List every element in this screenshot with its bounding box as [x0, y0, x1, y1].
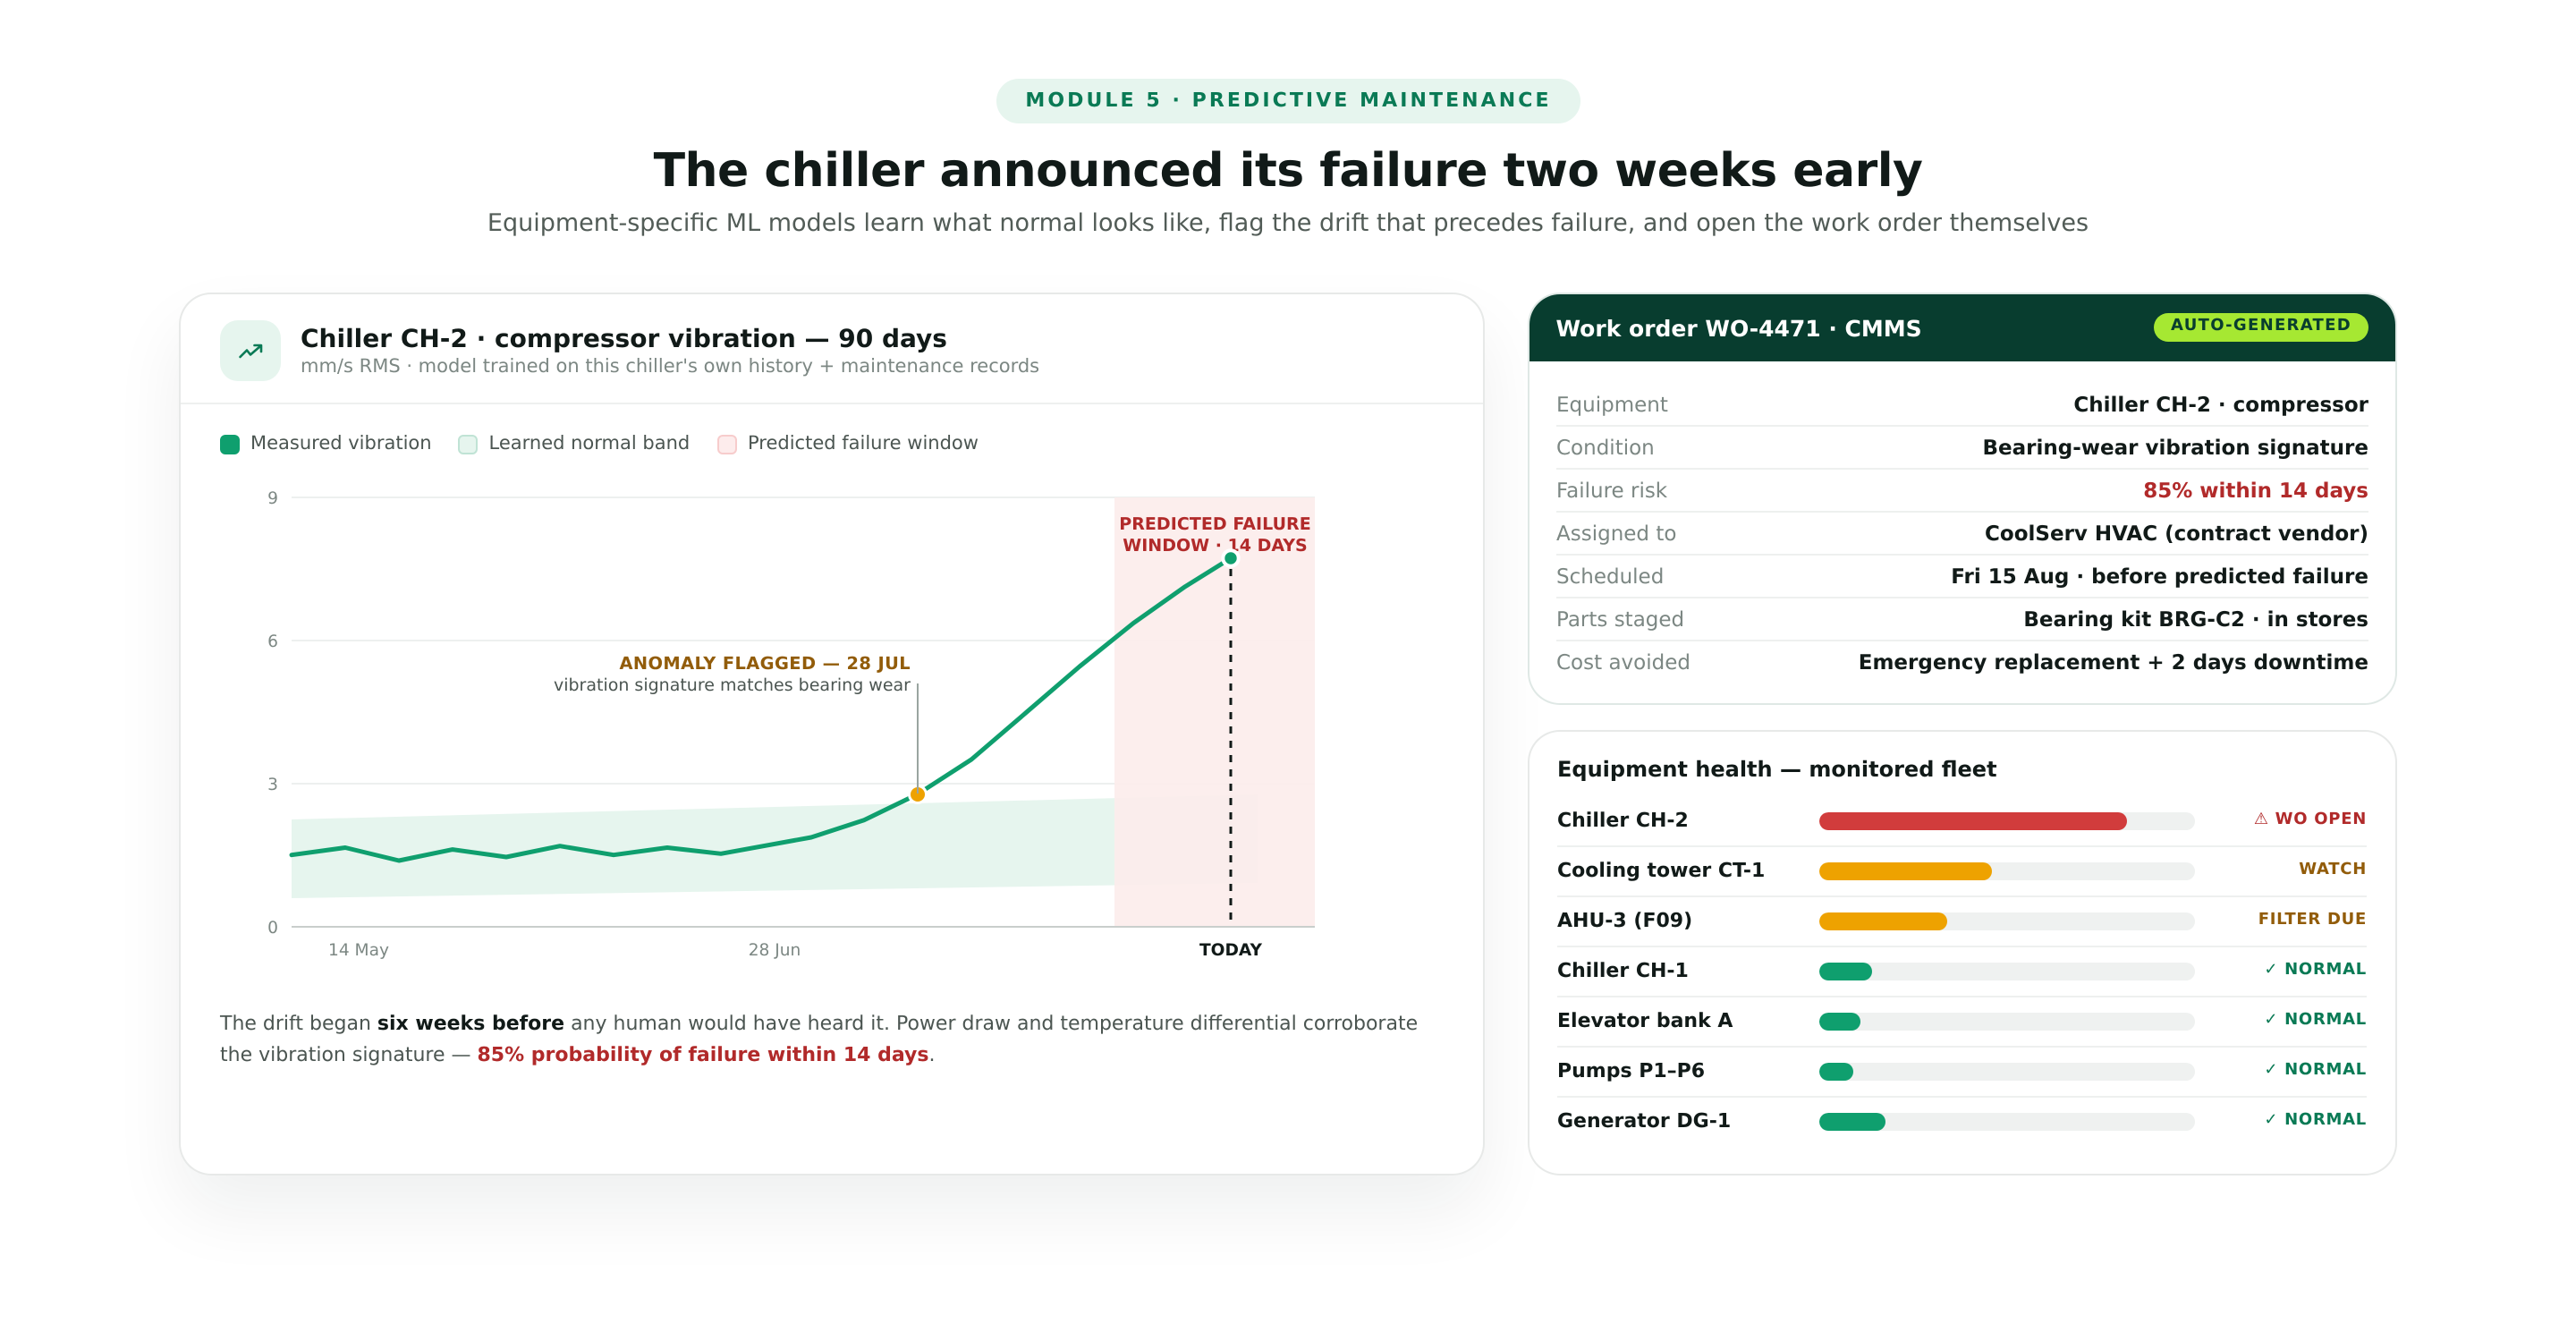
y axis labels: 9 — [267, 489, 278, 508]
row: parts staged: Bearing kit BRG-C2 · in stores — [2023, 608, 2368, 632]
row: elevator bank — [1557, 997, 2367, 1048]
row: condition — [1556, 427, 2368, 470]
anomaly label — [554, 653, 911, 695]
work order header — [1530, 294, 2395, 361]
anomaly leader line — [917, 683, 919, 794]
row: equipment: Equipment — [1556, 394, 1668, 417]
title: The chiller announced its failure two weeks early — [654, 144, 1922, 198]
card subtitle: mm/s RMS · model trained on this chiller's own history + maintenance records — [301, 355, 1039, 377]
row: generator — [1557, 1110, 2367, 1133]
legend swatch: failure window — [717, 435, 737, 454]
takeaway paragraph: the vibration signature — 85% probability of failure within 14 days. — [220, 1044, 935, 1066]
row: generator: ✓ NORMAL — [2264, 1110, 2367, 1129]
row: chiller CH-2: Chiller CH-2 — [1557, 810, 1689, 832]
row: parts staged — [1556, 598, 2368, 641]
row: AHU-3: AHU-3 (F09) — [1557, 910, 1692, 932]
header badge: module 5: MODULE 5 · PREDICTIVE MAINTENANCE — [1025, 89, 1552, 112]
takeaway paragraph: The drift began six weeks before any human would have heard it. Power draw and temperature differential corroborate — [220, 1013, 1418, 1035]
row: pumps: Pumps P1–P6 — [1557, 1060, 1705, 1082]
card title: Chiller CH-2 · compressor vibration — 90 days — [301, 324, 947, 353]
row: failure risk: 85% within 14 days — [2143, 480, 2368, 503]
row: scheduled: Scheduled — [1556, 565, 1664, 589]
row: elevator bank: Elevator bank A — [1557, 1010, 1733, 1032]
row: assigned to — [1556, 513, 2368, 556]
row: scheduled — [1556, 556, 2368, 598]
row: chiller CH-1: ✓ NORMAL — [2264, 960, 2367, 979]
row: pumps: ✓ NORMAL — [2264, 1060, 2367, 1079]
x axis labels: 28 Jun — [749, 941, 801, 960]
row: cooling tower: WATCH — [2299, 860, 2367, 878]
today marker — [1223, 550, 1239, 566]
y axis labels: 3 — [267, 776, 278, 794]
work order title: Work order WO-4471 · CMMS — [1556, 316, 1922, 342]
row: failure risk: Failure risk — [1556, 480, 1667, 503]
y axis labels — [267, 489, 278, 938]
row: chiller CH-2 — [1557, 797, 2367, 847]
row: AHU-3: FILTER DUE — [2258, 910, 2367, 929]
takeaway paragraph — [220, 1013, 1418, 1066]
row: assigned to: CoolServ HVAC (contract vendor) — [1985, 522, 2368, 546]
row: cooling tower: Cooling tower CT-1 — [1557, 860, 1765, 882]
row: chiller CH-1: Chiller CH-1 — [1557, 960, 1689, 982]
row: assigned to: Assigned to — [1556, 522, 1676, 546]
row: cost avoided: Emergency replacement + 2 days downtime — [1859, 651, 2368, 675]
window label: PREDICTED FAILURE — [1119, 514, 1311, 534]
today label: TODAY — [1199, 941, 1263, 960]
row: pumps — [1557, 1048, 2367, 1098]
legend swatch: normal band — [458, 435, 478, 454]
row: scheduled: Fri 15 Aug · before predicted failure — [1951, 565, 2368, 589]
row: cost avoided — [1556, 651, 2368, 675]
row: parts staged: Parts staged — [1556, 608, 1684, 632]
y axis labels: 0 — [267, 919, 278, 938]
legend swatch: measured vibration — [220, 435, 240, 454]
x axis labels — [328, 941, 801, 960]
anomaly marker — [909, 785, 927, 803]
legend label: failure window: Predicted failure window — [748, 431, 979, 453]
row: cost avoided: Cost avoided — [1556, 651, 1690, 675]
legend label: measured vibration: Measured vibration — [250, 431, 432, 453]
subtitle: Equipment-specific ML models learn what normal looks like, flag the drift that precedes failure, and open the work order themselves — [487, 209, 2089, 237]
row: chiller CH-2: ⚠ WO OPEN — [2254, 810, 2367, 828]
row: chiller CH-1 — [1557, 947, 2367, 997]
row: failure risk — [1556, 470, 2368, 513]
row: equipment — [1556, 384, 2368, 427]
panel: work order card — [1528, 293, 2397, 705]
x axis labels: 14 May — [328, 941, 389, 960]
y axis labels: 6 — [267, 632, 278, 651]
panel: equipment health — [1528, 730, 2397, 1175]
auto-generated tag: AUTO-GENERATED — [2171, 316, 2351, 335]
row: elevator bank: ✓ NORMAL — [2264, 1010, 2367, 1029]
legend — [220, 431, 979, 454]
row: condition: Condition — [1556, 437, 1655, 460]
icon: trending up — [220, 320, 281, 381]
row: cooling tower — [1557, 847, 2367, 897]
header badge: module 5 — [996, 79, 1580, 123]
row: AHU-3 — [1557, 897, 2367, 947]
today dashed line — [1229, 555, 1233, 921]
row: condition: Bearing-wear vibration signature — [1982, 437, 2368, 460]
row: equipment: Chiller CH-2 · compressor — [2073, 394, 2368, 417]
measured vibration line — [292, 558, 1231, 861]
vibration line chart — [267, 489, 1315, 960]
window label — [1119, 514, 1311, 556]
anomaly label: ANOMALY FLAGGED — 28 JUL — [620, 653, 911, 674]
panel: vibration chart card — [179, 293, 1485, 1175]
window label: WINDOW · 14 DAYS — [1123, 536, 1308, 556]
legend label: normal band: Learned normal band — [488, 431, 690, 453]
normal band — [292, 794, 1258, 898]
health title: Equipment health — monitored fleet — [1557, 757, 1997, 782]
failure window — [1114, 497, 1315, 927]
auto-generated tag — [2154, 313, 2368, 342]
anomaly label: vibration signature matches bearing wear — [554, 675, 911, 695]
row: generator: Generator DG-1 — [1557, 1110, 1731, 1133]
